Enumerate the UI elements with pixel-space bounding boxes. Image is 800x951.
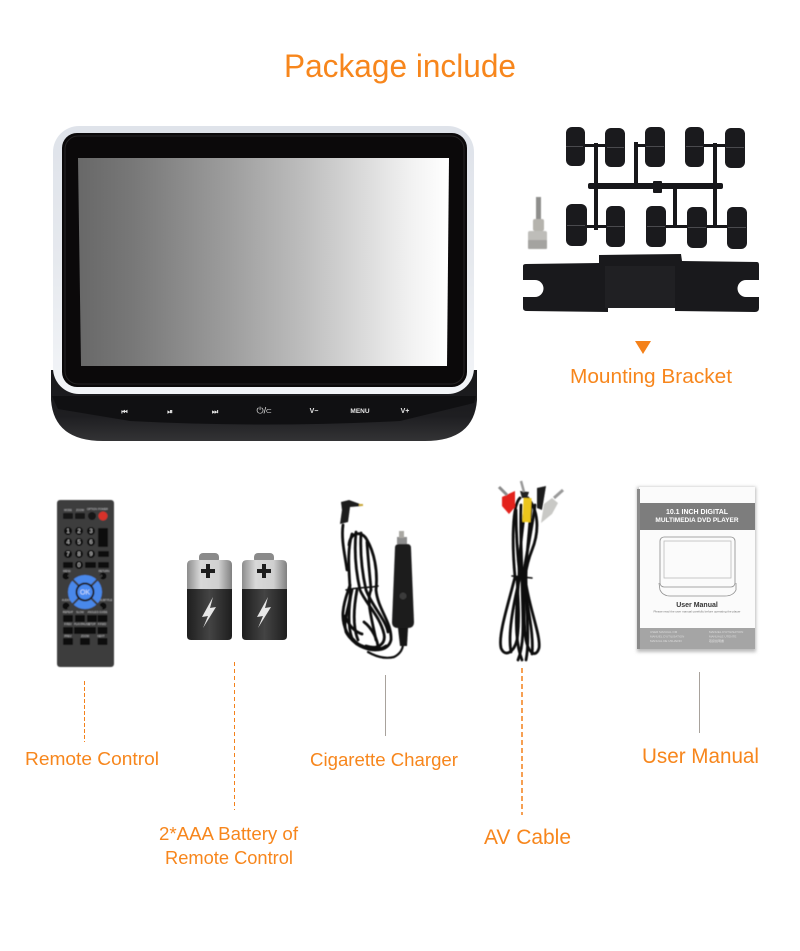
charger cable coil [342, 525, 403, 658]
leader: remote control [84, 681, 86, 742]
user manual: USER MANUAL OM [650, 630, 678, 634]
leader: av cable [521, 668, 523, 815]
remote control: 5 [77, 540, 81, 546]
remote small labels [62, 507, 112, 638]
remote small labels: REPEAT [63, 610, 74, 614]
user manual: MANUEL D'UTILISATION [709, 630, 743, 634]
battery left [187, 553, 232, 640]
user manual: 取扱説明書 [709, 638, 724, 643]
label: remote control: Remote Control [25, 749, 159, 769]
charger plug [392, 544, 414, 628]
remote body [57, 500, 114, 667]
remote small labels: POWER [98, 507, 108, 511]
batteries [187, 553, 287, 640]
monitor buttons: MENU [350, 408, 370, 415]
remote navigation pad [68, 575, 102, 609]
manual cover [639, 487, 755, 649]
manual device outline [659, 537, 736, 596]
manual footer band [640, 628, 755, 649]
user manual: MANUEL D'UTILISATION [650, 634, 684, 638]
remote small labels: SLOW [76, 610, 84, 614]
charger barrel jack [340, 500, 362, 524]
remote number keys [62, 527, 109, 610]
remote small labels: F.FWD [98, 622, 106, 626]
remote control: 1 [66, 529, 70, 535]
title: Package include [284, 48, 516, 84]
monitor buttons: V− [310, 408, 318, 415]
user manual: 10.1 INCH DIGITAL [666, 509, 729, 516]
remote small labels: D.GUIDE [97, 610, 108, 614]
battery right [242, 553, 287, 640]
remote small labels: MODE [64, 508, 72, 512]
rca plug red [502, 491, 515, 514]
remote control: 4 [66, 540, 70, 546]
label: av cable: AV Cable [484, 826, 571, 849]
remote control: 9 [89, 552, 93, 558]
remote small labels: NEXT [98, 634, 105, 638]
monitor base [51, 370, 477, 441]
monitor buttons [121, 406, 409, 416]
remote small labels: PLAY/PAUSE [74, 622, 90, 626]
manual title band [640, 503, 755, 530]
label: battery [159, 824, 299, 868]
monitor buttons: ⏻/⊂ [257, 406, 271, 416]
mounting bracket parts [523, 127, 759, 312]
thumb screw [528, 197, 547, 249]
remote small labels: SUBTITLE [100, 598, 112, 602]
remote small labels: ANGLE [88, 610, 97, 614]
leader: charger [384, 675, 386, 736]
monitor silver frame [53, 126, 474, 394]
rca black plug [537, 486, 546, 510]
remote control: 6 [89, 540, 93, 546]
plastic sprue [585, 142, 727, 230]
av cable loops [500, 498, 539, 660]
label: cigarette charger: Cigarette Charger [310, 750, 458, 770]
label: mounting bracket: Mounting Bracket [570, 366, 732, 388]
remote navigation pad: OK [80, 590, 90, 596]
remote small labels: F.REV [64, 622, 72, 626]
remote control: 8 [77, 552, 81, 558]
label: battery: 2*AAA Battery of [159, 824, 299, 844]
rca plug yellow [522, 498, 532, 522]
monitor buttons: ⏮ [121, 409, 128, 416]
manual heading: User Manual [676, 602, 718, 609]
user manual: Please read the user manual carefully before operating the player [653, 610, 741, 614]
monitor buttons: ⏭ [212, 409, 219, 416]
av cable [499, 481, 563, 660]
manual shadow [637, 487, 756, 652]
monitor [51, 126, 477, 441]
user manual [637, 487, 756, 652]
user manual: MULTIMEDIA DVD PLAYER [655, 517, 739, 524]
remote small labels: PREV [64, 634, 72, 638]
cigarette charger [340, 500, 414, 658]
arrow: bracket pointer [635, 341, 651, 354]
monitor buttons: V+ [401, 408, 409, 415]
remote small labels: AUDIO [62, 598, 70, 602]
plastic clips [566, 127, 747, 249]
remote small labels: ZOOM [81, 634, 89, 638]
clip highlights [566, 146, 746, 228]
remote small labels: MENU [63, 569, 71, 573]
bracket plate [523, 254, 759, 312]
label: battery: Remote Control [165, 848, 293, 868]
label: user manual: User Manual [642, 745, 759, 768]
monitor control strip [52, 396, 476, 424]
user manual: MANUALE UTENTE [709, 634, 736, 638]
monitor black bezel [62, 133, 467, 387]
rca plug white [541, 498, 558, 523]
remote control: 7 [66, 552, 70, 558]
user manual: MANUAL DE USUARIO [650, 639, 683, 643]
remote control: 3 [89, 529, 93, 535]
leader: battery [234, 662, 236, 810]
remote small labels: OPTION [87, 507, 97, 511]
remote control [57, 500, 114, 667]
remote control: 0 [77, 563, 81, 569]
remote lower buttons [63, 615, 108, 645]
remote small labels: ZOOM [76, 508, 84, 512]
monitor buttons: ⏯ [167, 409, 173, 416]
leader: user manual [698, 672, 700, 733]
remote small labels: STOP [88, 622, 96, 626]
remote control: 2 [77, 529, 81, 535]
monitor screen [78, 158, 449, 366]
remote small labels: RETURN [99, 569, 110, 573]
remote top buttons [63, 512, 108, 520]
